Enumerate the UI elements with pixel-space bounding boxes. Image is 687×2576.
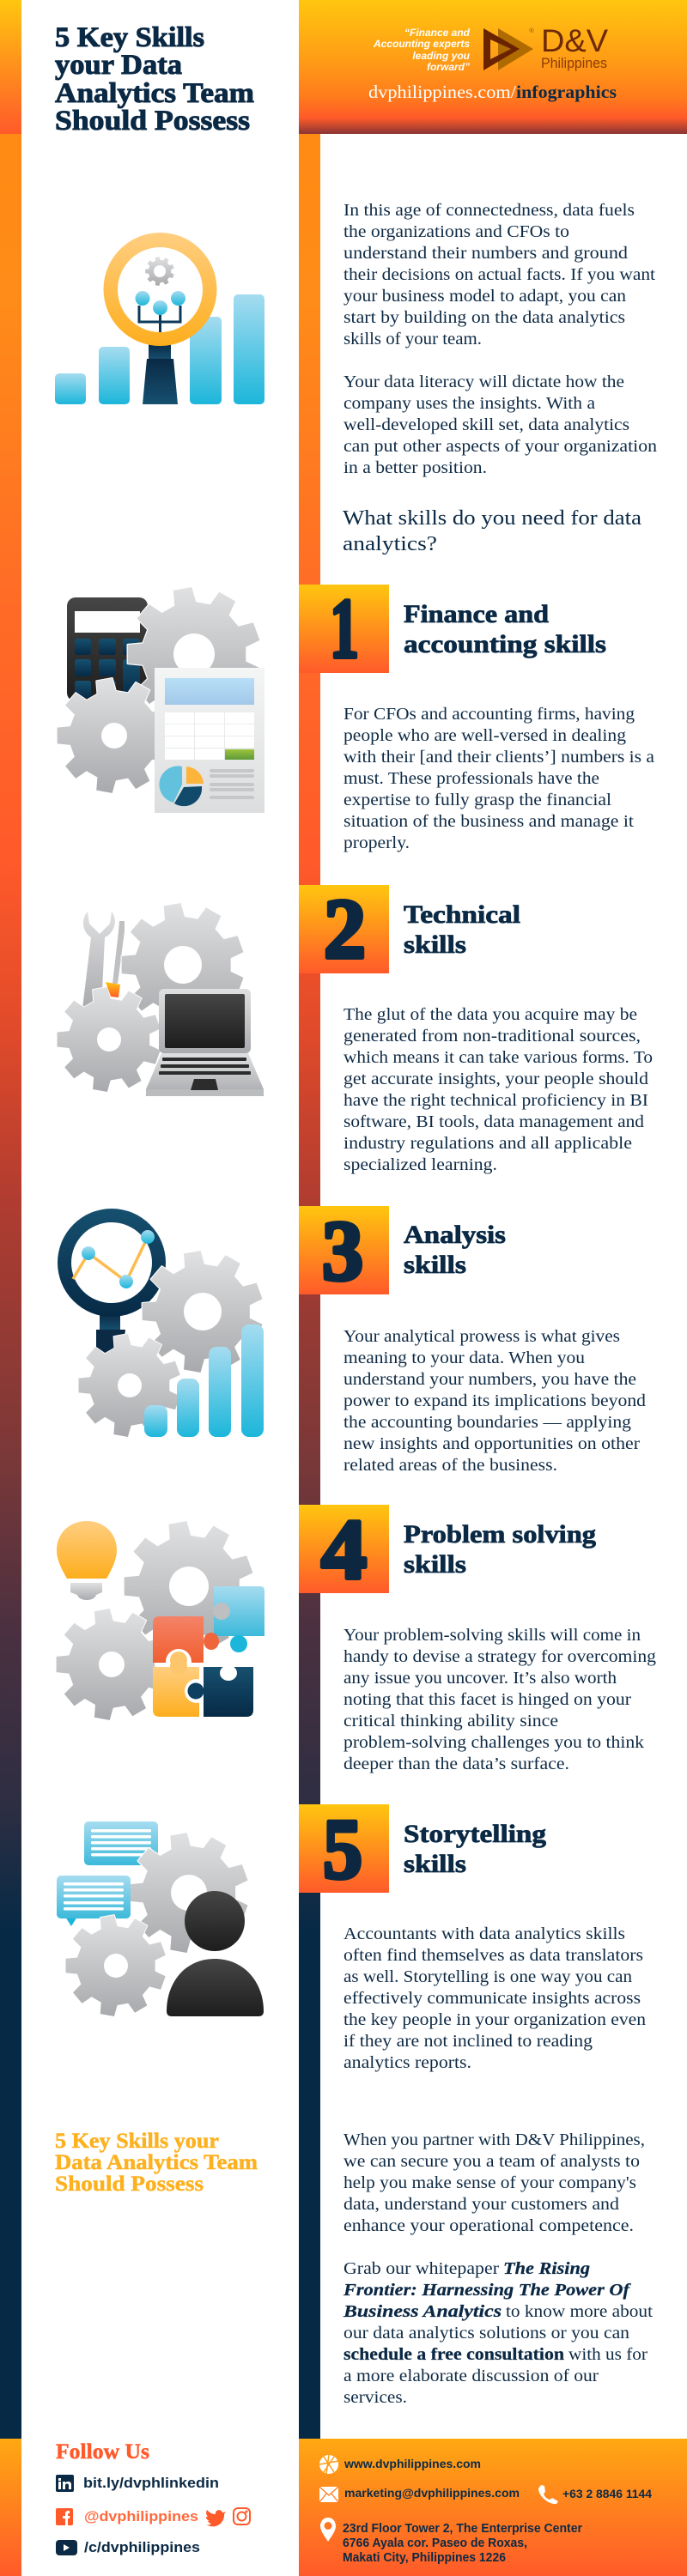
text block: skill 5: the key people in your organization even <box>344 2011 646 2029</box>
text block: skill 1: expertise to fully grasp the financial <box>344 791 612 809</box>
address <box>343 2522 582 2565</box>
text block: skill 4: problem-solving challenges you to think <box>344 1734 644 1752</box>
heading: finance and accounting skills: Finance and <box>404 600 549 628</box>
title: your Data <box>55 50 182 81</box>
url: infographics <box>516 82 617 102</box>
website: www.dvphilippines.com <box>344 2457 481 2470</box>
text block: introduction: well-developed skill set, data analytics <box>344 416 629 434</box>
text block: skill 4 <box>344 1627 656 1773</box>
heading: finance and accounting skills: accounting skills <box>404 630 606 658</box>
icon: hero magnifier over bars <box>55 233 264 404</box>
text block: introduction <box>344 202 657 477</box>
url <box>368 82 617 102</box>
text block: closing: to know more about <box>506 2303 654 2321</box>
youtube link: /c/dvphilippines <box>84 2539 200 2555</box>
heading: finance and accounting skills <box>404 600 606 658</box>
title: Analytics Team <box>55 78 254 109</box>
text block: closing: Business Analytics <box>343 2303 502 2321</box>
tagline <box>373 27 471 73</box>
heading: technical skills: Technical <box>404 900 520 929</box>
panel: header right <box>299 0 687 134</box>
text block: closing: with us for <box>568 2346 648 2364</box>
icon: mail <box>319 2487 338 2502</box>
text block: skill 5: analytics reports. <box>344 2054 471 2072</box>
icon: light bulb gears and puzzle <box>47 1512 264 1728</box>
text block: closing: Frontier: Harnessing The Power Of <box>343 2282 632 2300</box>
text block: introduction: start by building on the data analytics <box>344 309 625 327</box>
heading: closing title: Should Possess <box>55 2173 204 2196</box>
text block: skill 3: Your analytical prowess is what gives <box>344 1328 620 1346</box>
text block: skill 4: noting that this facet is hinged on your <box>344 1691 632 1709</box>
text block: closing <box>343 2131 654 2407</box>
text block: skill 1: with their [and their clients’] numbers is a <box>344 749 654 767</box>
text block: skill 2 <box>344 1006 653 1174</box>
text block: introduction: their decisions on actual facts. If you want <box>344 266 656 284</box>
phone number: +63 2 8846 1144 <box>562 2487 652 2500</box>
heading: closing title: Data Analytics Team <box>55 2151 258 2174</box>
text block: closing: The Rising <box>503 2260 590 2278</box>
icon: linkedin <box>56 2475 74 2492</box>
text block: closing: data, understand your customers and <box>344 2196 619 2214</box>
text block: skill 5: if they are not inclined to reading <box>344 2033 593 2051</box>
text block: skill 2: have the right technical proficiency in BI <box>344 1092 648 1110</box>
text block: skill 2: generated from non-traditional sources, <box>344 1027 641 1046</box>
text block: skill 1: situation of the business and manage it <box>344 813 635 831</box>
text block: introduction: your business model to adapt, you can <box>344 288 626 306</box>
tagline: Accounting experts <box>373 38 470 50</box>
social handle: @dvphilippines <box>84 2508 198 2524</box>
text block: skill 2: industry regulations and all applicable <box>344 1135 632 1153</box>
tagline: forward” <box>427 61 470 73</box>
icon: globe <box>319 2455 338 2474</box>
heading: analysis skills <box>404 1221 506 1279</box>
text block: skill 1: For CFOs and accounting firms, having <box>344 706 635 724</box>
text block: skill 2: software, BI tools, data management and <box>344 1113 644 1131</box>
title <box>55 22 254 136</box>
text block: introduction: can put other aspects of your organization <box>344 438 657 456</box>
panel: contact footer <box>299 2439 687 2576</box>
heading: problem solving skills: skills <box>404 1550 466 1579</box>
address: Makati City, Philippines 1226 <box>343 2551 506 2565</box>
text block: closing: Grab our whitepaper <box>344 2260 500 2278</box>
text block: skill 3: the accounting boundaries — applying <box>344 1414 631 1432</box>
text block: skill 1: people who are well-versed in dealing <box>344 727 626 745</box>
address: 23rd Floor Tower 2, The Enterprise Center <box>343 2522 582 2536</box>
heading: what skills <box>343 507 641 555</box>
text block: closing: a more elaborate discussion of our <box>344 2367 599 2385</box>
heading: problem solving skills: Problem solving <box>404 1520 596 1549</box>
text block: skill 1: properly. <box>344 834 410 852</box>
heading: problem solving skills <box>404 1520 596 1579</box>
text block: skill 5: effectively communicate insights across <box>344 1990 641 2008</box>
panel: skill 1 header <box>299 580 606 676</box>
text block: closing: help you make sense of your company's <box>344 2174 636 2192</box>
heading: storytelling skills <box>404 1820 546 1878</box>
number 4: 4 <box>321 1502 367 1597</box>
text block: skill 2: get accurate insights, your people should <box>344 1070 648 1088</box>
panel: left gradient bar <box>0 134 21 2439</box>
heading: what skills: analytics? <box>343 533 437 555</box>
panel: skill 3 header <box>299 1203 506 1298</box>
panel: follow us <box>56 2440 250 2555</box>
text block: skill 5: Accountants with data analytics skills <box>344 1925 625 1943</box>
heading: technical skills: skills <box>404 930 466 959</box>
number 3: 3 <box>322 1203 363 1298</box>
text block: closing: our data analytics solutions or you can <box>344 2324 629 2343</box>
text block: skill 3: understand your numbers, you have the <box>344 1371 636 1389</box>
panel: centre gradient bar <box>299 134 320 2439</box>
icon: facebook <box>56 2508 73 2525</box>
heading: analysis skills: skills <box>404 1251 466 1279</box>
text block: closing: we can secure you a team of analysts to <box>344 2153 640 2171</box>
text block: skill 4: critical thinking ability since <box>344 1712 558 1730</box>
text block: skill 4: handy to devise a strategy for overcoming <box>344 1648 656 1666</box>
text block: skill 3: meaning to your data. When you <box>344 1349 585 1367</box>
text block: closing: services. <box>344 2389 407 2407</box>
heading: storytelling skills: Storytelling <box>404 1820 546 1848</box>
icon: tools gears and laptop <box>48 894 264 1099</box>
address: 6766 Ayala cor. Paseo de Roxas, <box>343 2537 527 2550</box>
title: 5 Key Skills <box>55 22 204 53</box>
footer left accent <box>0 2439 21 2576</box>
text block: skill 5 <box>344 1925 646 2072</box>
tagline: leading you <box>412 50 471 62</box>
url: dvphilippines.com/ <box>368 82 516 102</box>
text block: introduction: in a better position. <box>344 459 487 477</box>
heading: follow us: Follow Us <box>56 2440 149 2464</box>
text block: skill 2: specialized learning. <box>344 1156 497 1174</box>
text block: introduction: skills of your team. <box>344 330 482 349</box>
text block: skill 3 <box>344 1328 646 1475</box>
text block: skill 5: often find themselves as data translators <box>344 1947 643 1965</box>
text block: introduction: the organizations and CFOs to <box>344 223 569 241</box>
header left accent <box>0 0 21 134</box>
logo: D&V Philippines <box>483 23 608 71</box>
heading: storytelling skills: skills <box>404 1850 466 1878</box>
text block: skill 4: deeper than the data’s surface. <box>344 1755 569 1773</box>
icon: phone <box>538 2485 558 2504</box>
text block: skill 1: must. These professionals have the <box>344 770 599 788</box>
number 5: 5 <box>323 1801 362 1897</box>
title: Should Possess <box>55 106 250 136</box>
text block: closing: enhance your operational competence. <box>344 2217 634 2235</box>
panel: skill 2 header <box>299 881 520 977</box>
text block: skill 3: new insights and opportunities on other <box>344 1435 641 1453</box>
text block: closing: When you partner with D&V Philippines, <box>344 2131 645 2149</box>
text block: introduction: In this age of connectedness, data fuels <box>344 202 635 220</box>
panel: skill 5 header <box>299 1801 546 1897</box>
heading: what skills: What skills do you need for data <box>343 507 641 530</box>
text block: skill 1 <box>344 706 654 852</box>
icon: magnifier chart gears and bars <box>58 1209 273 1444</box>
linkedin link: bit.ly/dvphlinkedin <box>83 2475 219 2491</box>
icon: speech bubbles gears and person <box>57 1821 264 2023</box>
logo: D&V Philippines: D&V <box>541 23 608 58</box>
icon: calculator gears and report <box>47 577 271 813</box>
logo: D&V Philippines: ® <box>529 27 534 34</box>
text block: skill 2: which means it can take various forms. To <box>344 1049 653 1067</box>
text block: skill 4: Your problem-solving skills will come in <box>344 1627 641 1645</box>
text block: closing: schedule a free consultation <box>344 2346 564 2364</box>
icon: instagram <box>234 2508 250 2524</box>
text block: skill 2: The glut of the data you acquire may be <box>344 1006 637 1024</box>
heading: closing title <box>55 2130 258 2196</box>
tagline: “Finance and <box>404 27 471 39</box>
text block: skill 5: as well. Storytelling is one way you can <box>344 1968 632 1986</box>
number 2: 2 <box>324 881 366 977</box>
logo: D&V Philippines: Philippines <box>541 55 607 71</box>
text block: introduction: understand their numbers and ground <box>344 245 628 263</box>
number 1: 1 <box>330 580 359 676</box>
heading: technical skills <box>404 900 520 959</box>
icon: twitter <box>206 2510 226 2526</box>
text block: introduction: Your data literacy will dictate how the <box>344 373 624 391</box>
text block: skill 3: power to expand its implications beyond <box>344 1392 646 1410</box>
icon: location pin <box>320 2518 336 2542</box>
text block: skill 4: any issue you uncover. It’s also worth <box>344 1670 617 1688</box>
email: marketing@dvphilippines.com <box>344 2486 520 2500</box>
heading: analysis skills: Analysis <box>404 1221 506 1249</box>
heading: closing title: 5 Key Skills your <box>55 2130 219 2153</box>
text block: introduction: company uses the insights. With a <box>344 395 595 413</box>
text block: skill 3: related areas of the business. <box>344 1457 557 1475</box>
panel: skill 4 header <box>299 1502 596 1597</box>
icon: youtube <box>56 2540 77 2555</box>
